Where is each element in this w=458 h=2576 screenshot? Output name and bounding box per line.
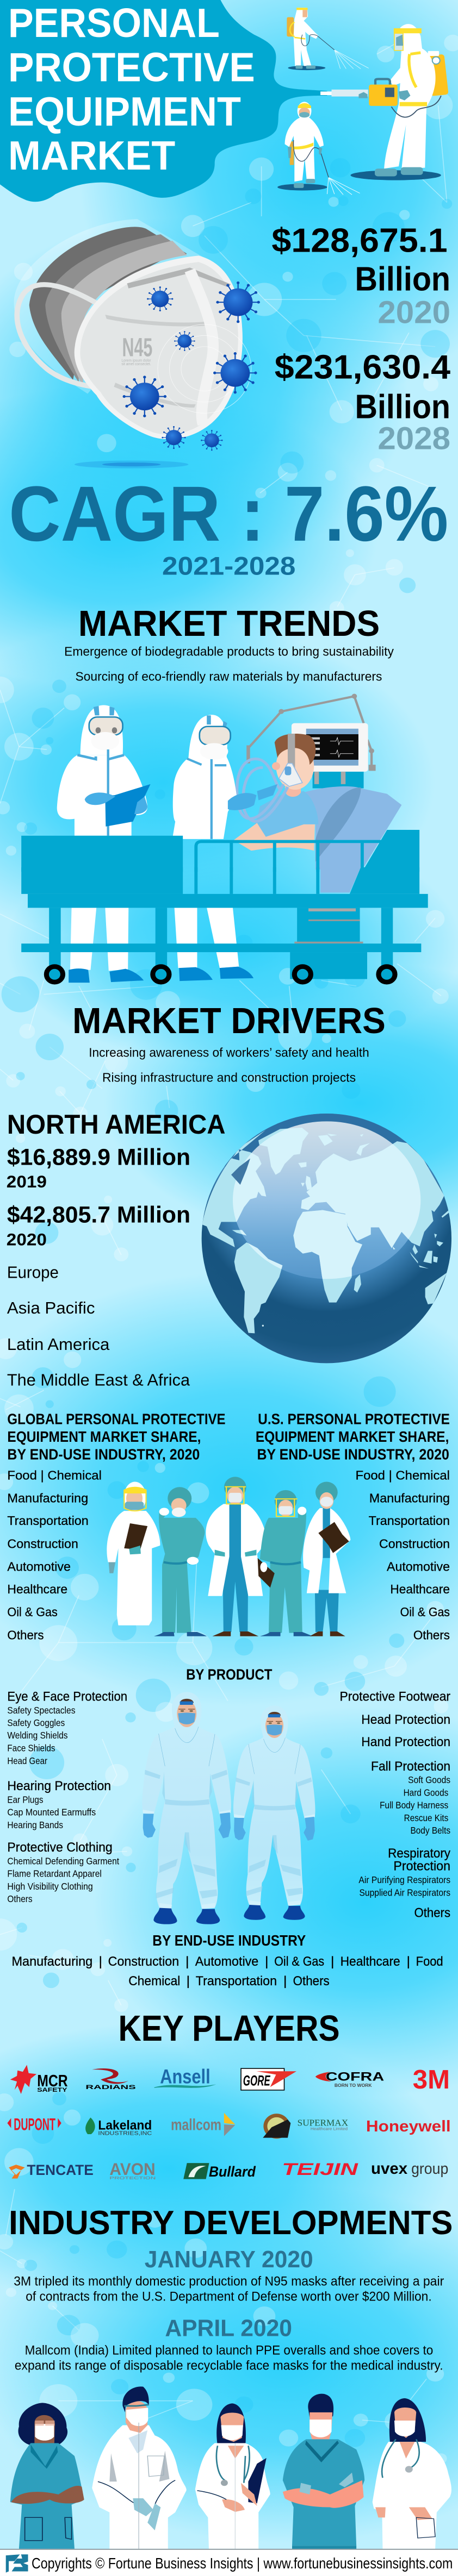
hearing protection: Cap Mounted Earmuffs: [7, 1807, 96, 1817]
end-use industry list: Manufacturing: [11, 1954, 92, 1969]
coverall figure right: [233, 1705, 315, 1920]
hearing protection: Hearing Protection: [7, 1779, 111, 1793]
end-use industry list: |: [99, 1954, 102, 1969]
north america stats: 2020: [7, 1230, 47, 1249]
protective clothing: Chemical Defending Garment: [7, 1856, 119, 1867]
respiratory protection: Protection: [393, 1859, 450, 1873]
market trends text: Sourcing of eco-friendly raw materials by manufacturers: [76, 670, 382, 684]
worker: large with blower: [320, 24, 449, 180]
hearing protection: [7, 1779, 111, 1830]
heading: key players: KEY PLAYERS: [118, 2009, 340, 2049]
doctor 4: man in scrubs: [283, 2394, 364, 2549]
north america stats: $16,889.9 Million: [7, 1144, 190, 1170]
end-use industry list: [11, 1954, 443, 1989]
logo: Supermax: [263, 2114, 348, 2139]
patient on bed: [234, 734, 401, 870]
global share heading: BY END-USE INDUSTRY, 2020: [7, 1446, 200, 1463]
logo: MCR Safety: MCR: [37, 2071, 68, 2090]
protective clothing: Flame Retardant Apparel: [7, 1868, 102, 1879]
end-use industry list: Others: [293, 1974, 330, 1989]
end-use industry list: |: [283, 1974, 287, 1989]
N45 mask illustration: [14, 219, 260, 439]
global end-use list: [7, 1468, 102, 1642]
section: regions and market share: [7, 1299, 450, 1741]
regions list: [7, 1299, 190, 1389]
amount 2020: $128,675.1: [271, 221, 448, 259]
eye and face protection: Eye & Face Protection: [7, 1690, 127, 1704]
respiratory protection: [358, 1846, 451, 1898]
logo: Gore: [241, 2068, 296, 2090]
title: PERSONAL: [8, 1, 220, 46]
section: bed and market drivers: [7, 867, 428, 1281]
end-use industry list: |: [407, 1954, 410, 1969]
development: April 2020: [15, 2315, 443, 2373]
global end-use list: Transportation: [7, 1514, 89, 1528]
fall protection: Body Belts: [410, 1825, 450, 1836]
globe: [196, 1112, 458, 1363]
hospital bed upper: [21, 830, 419, 872]
hand protection: Hand Protection: [361, 1735, 450, 1749]
logo: Bullard: [183, 2163, 256, 2180]
worker: sprayer front: [277, 102, 360, 195]
north america stats: $42,805.7 Million: [7, 1202, 190, 1228]
end-use industry list: Construction: [108, 1954, 179, 1969]
logo: Honeywell: Honeywell: [366, 2118, 451, 2135]
respiratory protection: Respiratory: [388, 1846, 451, 1861]
global end-use list: Construction: [7, 1537, 78, 1551]
logo: uvex group: [371, 2160, 448, 2178]
logo: MCR Safety: SAFETY: [37, 2087, 67, 2093]
U.S. end-use list: Transportation: [369, 1514, 450, 1528]
logo: uvex group: uvex: [371, 2160, 407, 2178]
end-use industry list: |: [331, 1954, 334, 1969]
logo: TenCate: TENCATE: [27, 2162, 94, 2178]
people: center doctor in white coat: [206, 1477, 267, 1636]
global share heading: [7, 1410, 226, 1463]
N45 mask illustration: N45: [122, 333, 152, 362]
amount 2028: [275, 348, 451, 456]
north america stats: [7, 1109, 226, 1249]
amount 2020: [271, 221, 450, 330]
logo: Gore: GORE: [243, 2072, 270, 2089]
legs of doctors: [69, 908, 253, 983]
hospital bed lower: [21, 867, 428, 982]
market drivers text: Rising infrastructure and construction projects: [102, 1071, 356, 1085]
global end-use list: Oil & Gas: [7, 1605, 58, 1620]
doctor 5: woman in white coat: [373, 2398, 451, 2549]
logo: Avon Protection: AVON: [109, 2160, 156, 2179]
U.S. end-use list: Construction: [379, 1537, 450, 1551]
fall protection: Rescue Kits: [404, 1812, 448, 1823]
title: MARKET: [8, 133, 175, 179]
coverall figure left: [142, 1692, 231, 1924]
north america stats: NORTH AMERICA: [7, 1109, 226, 1140]
logo: Mallcom: mallcom: [171, 2116, 221, 2134]
logo: Cofra: [315, 2069, 385, 2088]
logo: MCR Safety: [10, 2065, 68, 2094]
protective clothing: High Visibility Clothing: [7, 1881, 93, 1892]
section: CAGR and market trends: [9, 426, 448, 872]
hearing protection: Ear Plugs: [7, 1795, 44, 1805]
section: header, mask and market size: [0, 0, 451, 456]
logo: Cofra: BORN TO WORK: [335, 2083, 372, 2088]
market trends text: Emergence of biodegradable products to bring sustainability: [64, 645, 394, 659]
global end-use list: Healthcare: [7, 1583, 67, 1597]
fall protection: Fall Protection: [371, 1760, 450, 1774]
heading: market drivers: MARKET DRIVERS: [72, 1001, 386, 1041]
regions list: The Middle East & Africa: [7, 1371, 190, 1389]
doctor 2: man in white coat: [92, 2386, 187, 2549]
footer logo: [6, 2554, 28, 2573]
eye and face protection: Safety Spectacles: [7, 1705, 76, 1716]
logo: Lakeland: INDUSTRIES,INC: [98, 2131, 152, 2136]
eye and face protection: Safety Goggles: [7, 1717, 65, 1728]
people: teal scrubs worker: [154, 1487, 207, 1636]
ventilator: [246, 694, 376, 789]
development: January 2020: [14, 2246, 444, 2304]
global end-use list: Others: [7, 1628, 44, 1642]
doctor 3: woman with clipboard: [195, 2403, 270, 2549]
amount 2020: 2020: [377, 295, 450, 330]
amount 2028: $231,630.4: [275, 348, 451, 386]
title: [8, 1, 255, 179]
end-use industry list: |: [185, 1954, 189, 1969]
market trends text: [64, 645, 394, 684]
eye and face items continued: Face Shields: [7, 1743, 55, 1753]
region: Europe: Europe: [7, 1263, 59, 1281]
global end-use list: Automotive: [7, 1560, 71, 1574]
coverall figures: [142, 1692, 315, 1924]
logo: uvex group: group: [411, 2160, 448, 2178]
global share heading: GLOBAL PERSONAL PROTECTIVE: [7, 1410, 226, 1427]
end-use industry list: Transportation: [196, 1974, 277, 1989]
global end-use list: Food | Chemical: [7, 1468, 102, 1483]
head protection: Head Protection: [361, 1712, 450, 1727]
eye and face protection: [7, 1690, 127, 1741]
CAGR period: 2021-2028: [162, 552, 295, 580]
worker: sprayer top: [287, 8, 369, 70]
logo: DuPont: [7, 2115, 61, 2134]
amount 2028: 2028: [377, 421, 450, 456]
U.S. end-use list: Others: [413, 1628, 450, 1642]
logo: Radians: [85, 2068, 136, 2091]
end-use industry list: Chemical: [128, 1974, 180, 1989]
footer: [0, 2549, 458, 2576]
global end-use list: Manufacturing: [7, 1491, 88, 1505]
logo: DuPont: DUPONT: [14, 2115, 55, 2134]
market drivers text: Increasing awareness of workers’ safety and health: [89, 1046, 369, 1060]
end-use industry list: Oil & Gas: [274, 1954, 324, 1969]
logo: Radians: RADIANS: [85, 2084, 136, 2091]
others: Others: [414, 1906, 450, 1920]
U.S. end-use list: Automotive: [387, 1560, 450, 1574]
logo: Ansell: Ansell: [160, 2066, 211, 2087]
section: products and key players: [7, 1735, 451, 2180]
U.S. share heading: [256, 1410, 450, 1463]
protective clothing: Protective Clothing: [7, 1841, 113, 1855]
regions list: Asia Pacific: [7, 1299, 95, 1317]
end-use industry list: |: [265, 1954, 269, 1969]
logo: Teijin: TEIJIN: [282, 2160, 358, 2179]
development: January 2020: JANUARY 2020: [145, 2246, 313, 2273]
market drivers text: [89, 1046, 369, 1085]
N45 mask illustration: Lorem ipsum dolor: [121, 358, 151, 362]
eye and face protection: Welding Shields: [7, 1730, 68, 1741]
logo: Supermax: SUPERMAX: [298, 2117, 348, 2128]
eye and face items continued: [7, 1743, 55, 1766]
logo: Lakeland: [85, 2117, 152, 2136]
doctor with goggles: [172, 715, 277, 839]
end-use industry list: Automotive: [195, 1954, 258, 1969]
heading: market trends: MARKET TRENDS: [78, 603, 380, 644]
U.S. end-use list: Manufacturing: [369, 1491, 450, 1505]
end-use industry list: Food: [416, 1954, 443, 1969]
people: doctor with clipboard right: [303, 1482, 350, 1636]
logo: Bullard: Bullard: [209, 2164, 256, 2180]
logo: Lakeland: Lakeland: [98, 2118, 152, 2133]
eye and face items continued: Head Gear: [7, 1755, 47, 1766]
N45 mask illustration: sit amet consectet.: [121, 361, 151, 366]
by product heading: BY PRODUCT: [186, 1666, 272, 1683]
U.S. end-use list: Food | Chemical: [356, 1468, 450, 1483]
hearing protection: Hearing Bands: [7, 1820, 63, 1830]
U.S. end-use list: Oil & Gas: [400, 1605, 450, 1620]
logo: Avon Protection: PROTECTION: [109, 2175, 156, 2180]
end-use industry list: Healthcare: [341, 1954, 400, 1969]
protective clothing: Others: [7, 1893, 33, 1904]
fall protection: Soft Goods: [408, 1775, 450, 1785]
title: PROTECTIVE: [8, 45, 255, 90]
global share heading: EQUIPMENT MARKET SHARE,: [7, 1428, 201, 1445]
people: teal scrubs worker with clipboard: [258, 1490, 313, 1636]
logo: Cofra: COFRA: [326, 2069, 385, 2083]
header blob: [0, 0, 327, 202]
regions list: Latin America: [7, 1335, 110, 1354]
doctor 1: woman in scrubs: [10, 2403, 84, 2549]
development: April 2020: APRIL 2020: [165, 2315, 292, 2341]
by end-use industry heading: BY END-USE INDUSTRY: [152, 1932, 306, 1949]
protective clothing: [7, 1841, 119, 1904]
title: EQUIPMENT: [8, 89, 241, 135]
end-use industry list: |: [187, 1974, 190, 1989]
logo: 3M: 3M: [413, 2064, 450, 2094]
people: white suit worker: [107, 1482, 160, 1625]
fall protection: [371, 1760, 450, 1836]
logo: Supermax: Healthcare Limited: [311, 2127, 348, 2131]
section: industry developments: [0, 2204, 458, 2576]
north america stats: 2019: [7, 1172, 47, 1191]
U.S. end-use list: [356, 1468, 450, 1642]
U.S. end-use list: Healthcare: [390, 1583, 450, 1597]
doctor with clipboard: [57, 705, 151, 836]
fall protection: Hard Goods: [404, 1787, 448, 1798]
mask bottom viruses: [75, 426, 222, 468]
